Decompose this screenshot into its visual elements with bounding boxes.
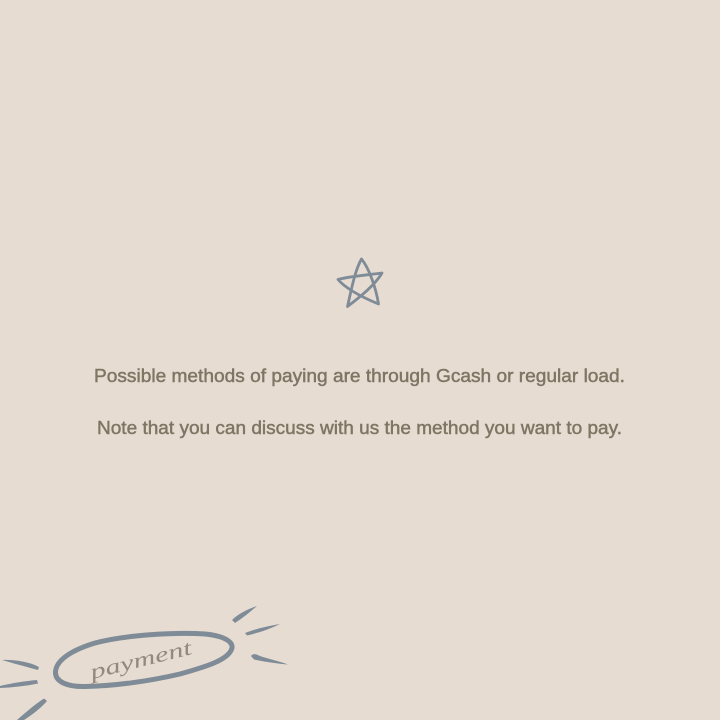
icon: right sparkle lines — [232, 606, 288, 664]
label: payment: payment — [85, 635, 196, 685]
callout: payment label in hand-drawn oval — [55, 633, 232, 687]
icon: hand-drawn star — [338, 259, 382, 306]
hand-drawn oval — [55, 633, 232, 687]
text: payment methods: Possible methods of paying are through Gcash or regular load. — [94, 366, 625, 386]
icon: left sparkle lines — [0, 660, 47, 720]
text: discussion note: Note that you can discuss with us the method you want to pay. — [97, 418, 622, 438]
